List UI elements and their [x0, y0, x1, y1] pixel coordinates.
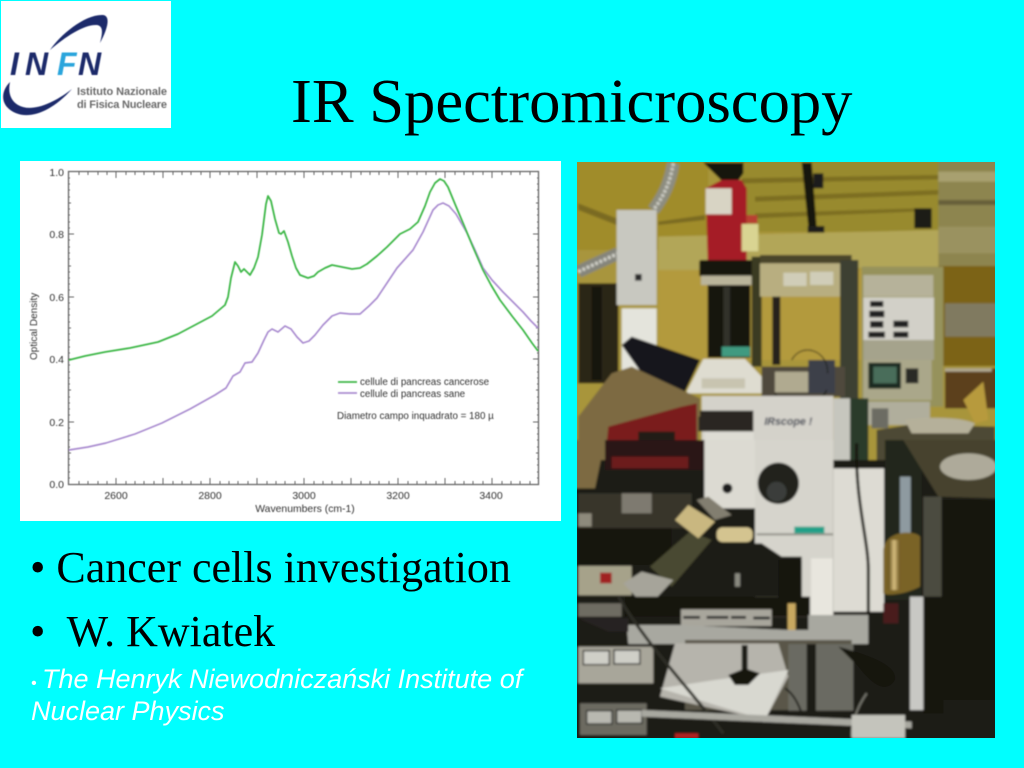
logo institute name: Istituto Nazionale [77, 86, 167, 98]
bullet: W. Kwiatek: • W. Kwiatek [30, 607, 275, 656]
x axis tick labels: 2600 [104, 490, 128, 502]
curve: cancer cells [69, 179, 538, 360]
black top tube [703, 163, 743, 181]
y axis tick labels: 0.2 [49, 417, 64, 429]
legend: cellule di pancreas sane [360, 389, 466, 400]
y axis tick labels: 1.0 [49, 167, 64, 179]
ducts [653, 163, 673, 210]
logo upper arc [50, 15, 108, 50]
x axis tick labels [104, 490, 503, 502]
legend: cellule di pancreas cancerose [360, 377, 490, 388]
upper part of photo [575, 160, 998, 463]
rack [752, 257, 762, 367]
cables [618, 597, 723, 733]
x axis tick labels: 3200 [386, 490, 410, 502]
x axis tick labels: 3400 [479, 490, 503, 502]
microscope model name: IRscope ! [764, 416, 813, 428]
microscope binocular [622, 337, 700, 392]
right block [833, 468, 884, 612]
lower part of photo [575, 440, 998, 743]
x axis tick labels: 2800 [198, 490, 222, 502]
stage parts [762, 367, 845, 397]
legend [337, 377, 494, 422]
institute text: Nuclear Physics [31, 696, 225, 726]
white box [617, 210, 657, 305]
x axis title: Wavenumbers (cm-1) [255, 504, 355, 515]
left: cloth and shelf [577, 440, 602, 490]
stage and objectives [752, 542, 803, 599]
logo letters [10, 46, 102, 82]
y axis tick labels: 0.6 [49, 292, 64, 304]
instrument panels [862, 267, 943, 407]
red cylinder [706, 180, 747, 260]
logo letters: N [25, 46, 49, 82]
logo: INFN [1, 1, 171, 128]
bullet: Cancer cells investigation: • Cancer cells investigation [30, 543, 511, 592]
red and tan cloth [578, 367, 700, 460]
logo letters: F [57, 46, 78, 82]
logo letters: I [10, 46, 20, 82]
microscope body [700, 394, 835, 442]
lower shelf [642, 710, 912, 728]
chart panel [20, 161, 561, 521]
institute text: The Henryk Niewodniczański Institute of [42, 664, 525, 694]
legend: Diametro campo inquadrato = 180 µ [337, 411, 494, 422]
y axis title: Optical Density [29, 293, 40, 360]
dark left rack [578, 283, 618, 383]
logo: INFN: di Fisica Nucleare [77, 99, 167, 111]
right cabinet [885, 440, 922, 600]
x axis tick labels: 3000 [292, 490, 316, 502]
curve: healthy cells [69, 203, 538, 450]
y axis tick labels: 0.4 [49, 354, 64, 366]
title: IR Spectromicroscopy [291, 66, 853, 136]
institute text: • [31, 675, 37, 692]
right bench [877, 425, 995, 460]
y axis tick labels: 0.8 [49, 229, 64, 241]
y axis tick labels [49, 167, 64, 491]
stage plate [625, 597, 810, 617]
logo lower arc [3, 82, 72, 115]
photo: IR microscope laboratory [575, 160, 998, 743]
rings and black cylinder [699, 260, 759, 277]
microscope column [704, 440, 755, 508]
institute text [31, 664, 525, 726]
plot frame and ticks [68, 172, 539, 484]
table underside and joystick [685, 640, 852, 710]
logo letters: N [78, 46, 102, 82]
y axis tick labels: 0.0 [49, 479, 64, 491]
